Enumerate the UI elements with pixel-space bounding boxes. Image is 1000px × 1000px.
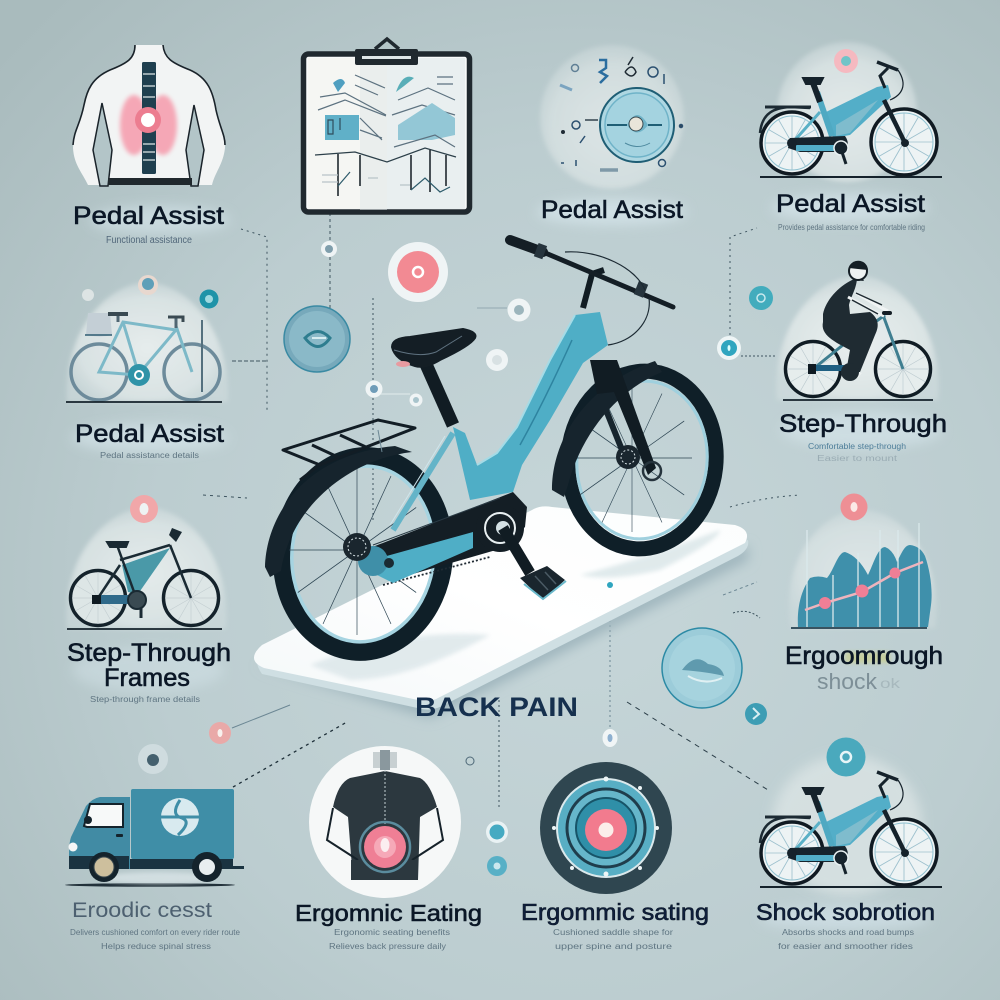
heading: pedal assist 1 (73, 202, 230, 246)
heading: pedal assist 2: Pedal Assist (541, 196, 683, 224)
heading: ergomnic eating: Relieves back pressure daily (329, 942, 446, 951)
icon: teal badges centre (486, 821, 508, 876)
icon: pale gear badge (138, 744, 168, 774)
rear wheel (272, 448, 454, 660)
connector lines (203, 213, 800, 810)
panel: person back pain (309, 746, 461, 898)
heading: pedal assist 4: Pedal Assist (75, 420, 224, 448)
fork (590, 360, 661, 480)
handlebar (510, 240, 673, 307)
heading: step-through frames: Step-through frame details (90, 695, 200, 704)
heading: pedal assist 1: Pedal Assist (73, 202, 224, 230)
heading: shock sobrotion: Shock sobrotion (756, 899, 935, 925)
heading: eroodic: Delivers cushioned comfort on every rider route (70, 928, 241, 937)
icon: teal medallion right (662, 628, 742, 708)
heading: step-through frames (67, 639, 231, 704)
heading: eroodic: Eroodic cesst (72, 899, 212, 922)
wheel (89, 852, 119, 882)
pain centre (585, 809, 627, 851)
heading: step-through (779, 410, 947, 463)
clipboard clip (355, 39, 418, 65)
pain halo (120, 95, 177, 155)
heading: ergomnic eating (295, 900, 482, 951)
head stem (583, 270, 604, 308)
manual diagrams (315, 75, 456, 196)
icon: pink badge (840, 494, 868, 520)
heading: step-through: Easier to mount (817, 454, 898, 463)
icon: top badge (138, 275, 158, 295)
heading: step-through: Step-Through (779, 410, 947, 438)
heading: step-through frames: Step-Through (67, 639, 231, 667)
heading: step-through: Comfortable step-through (808, 442, 906, 451)
title: back pain: BACK PAIN (415, 692, 578, 722)
sensor disc (600, 88, 674, 162)
heading: shock sobrotion (756, 899, 935, 951)
heading: shock sobrotion: Absorbs shocks and road bumps (782, 928, 914, 937)
windshield (84, 804, 123, 827)
heading: pedal assist 3: Pedal Assist (776, 190, 925, 218)
cab (69, 797, 130, 869)
icon: small white badges (321, 241, 530, 406)
panel: e-bike bottom right (760, 738, 942, 895)
seat post (425, 362, 453, 425)
rear fender (265, 446, 412, 577)
cargo box (131, 789, 234, 859)
body side gaps (93, 103, 204, 186)
panel: e-bike top right (760, 42, 942, 182)
icon: teal badge lower right (745, 703, 767, 725)
pain point (135, 107, 161, 133)
chain (380, 510, 490, 585)
heading: step-through frames: Frames (104, 664, 190, 692)
crank (476, 504, 530, 573)
panel: pale bike left (66, 275, 228, 402)
trend line (805, 562, 923, 610)
heading: ergommic sating: Ergommic sating (521, 899, 709, 925)
heading: pedal assist 3 (772, 190, 928, 232)
panel: step-through bike left (66, 495, 227, 629)
heading: ergommic sating: Cushioned saddle shape for (553, 928, 673, 937)
panel: rider on bike (776, 261, 939, 400)
spine (142, 62, 156, 174)
platform (254, 506, 748, 718)
heading: ergoomrough (785, 642, 943, 694)
icon: teal badge (826, 738, 866, 776)
rear rack (283, 420, 415, 480)
frame (390, 312, 608, 530)
heading: ergoomrough: ok (880, 675, 901, 691)
icon: teal badge (200, 290, 218, 308)
brake cable (565, 252, 649, 345)
chain guard (343, 492, 527, 583)
panel: seating target (540, 762, 672, 894)
heading: ergoomrough: Ergoomrough (785, 642, 943, 670)
heading: ergomnic eating: Ergonomic seating benefits (334, 928, 450, 937)
front fender (552, 361, 662, 497)
heading: shock sobrotion: for easier and smoother rides (778, 942, 913, 951)
panel: main e-bike (265, 240, 725, 660)
heading: ergommic sating (521, 899, 709, 951)
heading: ergommic sating: upper spine and posture (555, 942, 673, 951)
icon: pedal hub (128, 364, 150, 386)
panel: pedal assist sensor medallion (540, 45, 684, 189)
heading: pedal assist 1: Functional assistance (106, 235, 192, 246)
heading: pedal assist 4: Pedal assistance details (100, 451, 199, 460)
panel: area chart (789, 494, 937, 628)
wheel (192, 852, 222, 882)
icon: large pink target (388, 242, 448, 302)
icon: pink badge lower left (209, 722, 231, 744)
icon: pink badge (130, 495, 158, 523)
icon: teal medallion left (284, 306, 350, 372)
teal pin on platform (607, 582, 613, 588)
ground (65, 883, 235, 887)
front wheel (559, 364, 725, 556)
rider (823, 261, 892, 381)
heading: ergoomrough: shock (817, 669, 878, 694)
logo (161, 798, 199, 836)
saddle (392, 329, 476, 367)
icon: small outline badge (466, 757, 474, 765)
heading: ergomnic eating: Ergomnic Eating (295, 900, 482, 926)
panel: clipboard manual (304, 39, 470, 212)
grid lines (807, 523, 919, 627)
pedal (520, 566, 566, 600)
icon: pin (834, 49, 858, 73)
chart area (798, 545, 932, 627)
pain target (360, 822, 410, 872)
panel: delivery truck (65, 789, 244, 887)
heading: eroodic: Helps reduce spinal stress (101, 942, 211, 951)
scattered glyphs (560, 57, 682, 170)
heading: eroodic (70, 899, 241, 951)
basket (86, 313, 112, 336)
panel: back pain body (73, 45, 225, 186)
icon: small white badge (602, 729, 618, 747)
icon: teal badge rider (749, 286, 773, 310)
heading: pedal assist 3: Provides pedal assistance for comfortable riding (778, 223, 925, 232)
heading: pedal assist 4 (72, 420, 228, 460)
icon: white teal badge (717, 336, 741, 360)
